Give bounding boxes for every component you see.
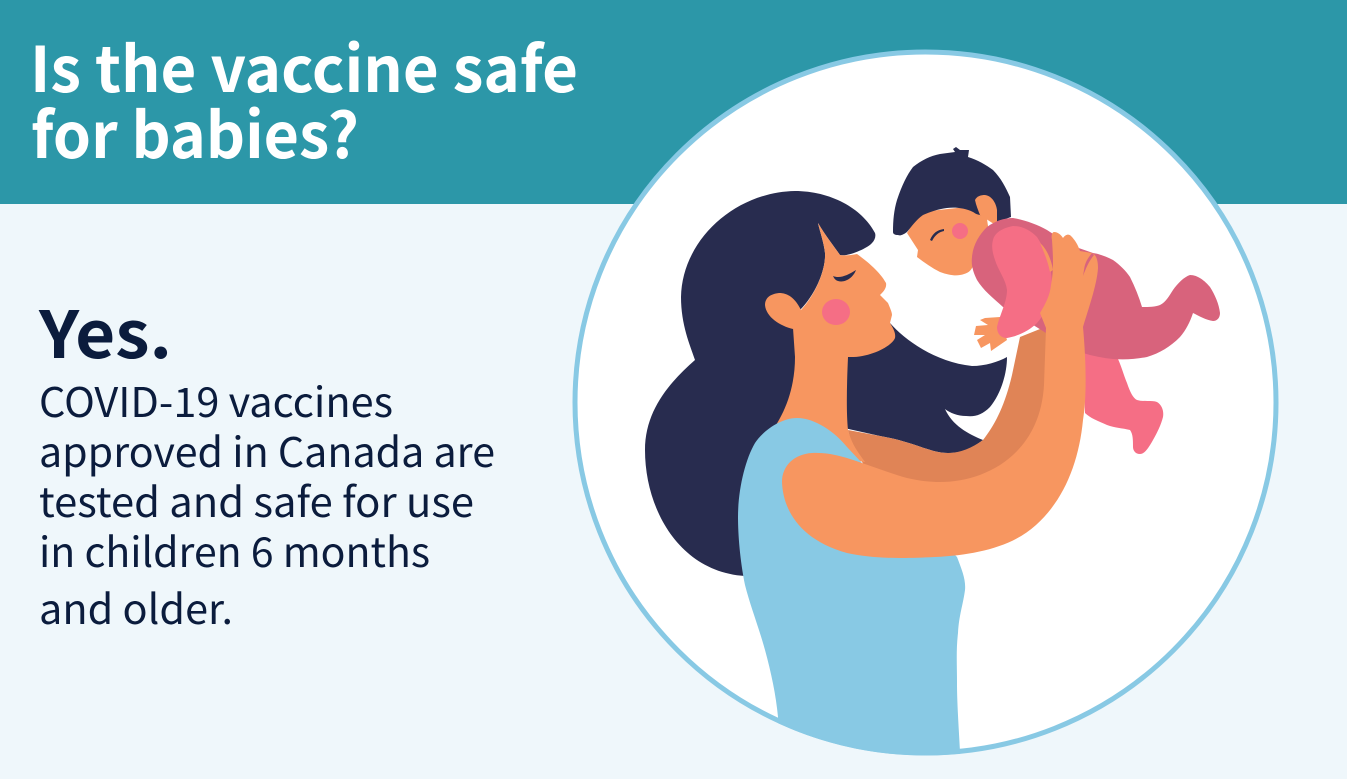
- mother near arm and hand: [782, 232, 1098, 558]
- baby rear leg: [1083, 353, 1163, 454]
- baby hair: [893, 147, 1011, 235]
- answer body text: tested and safe for use: [39, 469, 474, 529]
- answer heading: Yes.: [38, 283, 172, 377]
- header band: [0, 0, 1347, 204]
- title: [30, 20, 578, 177]
- baby ear: [975, 195, 997, 226]
- baby closed eye: [930, 229, 944, 241]
- baby arm: [992, 226, 1052, 338]
- mother ear: [765, 293, 801, 329]
- baby hand: [974, 317, 1007, 351]
- white circle frame: [575, 52, 1276, 753]
- answer body text: approved in Canada are: [39, 419, 495, 479]
- mother hair: [645, 191, 875, 576]
- mother hair behind neck: [846, 323, 1007, 453]
- baby face: [907, 205, 990, 275]
- mother closed eye: [833, 270, 856, 281]
- answer body text: in children 6 months: [39, 519, 430, 579]
- mother thumb: [1040, 243, 1053, 272]
- far arm in shade: [848, 325, 1050, 490]
- title: for babies?: [31, 86, 359, 177]
- answer body text: and older.: [39, 576, 233, 636]
- baby cheek: [952, 223, 968, 239]
- baby: [893, 147, 1220, 454]
- mother: [645, 191, 1050, 770]
- mother face and neck: [776, 223, 896, 462]
- mother cheek: [822, 299, 850, 325]
- finger gap: [1083, 253, 1094, 276]
- answer body text: [39, 369, 495, 636]
- mother dress: [738, 418, 965, 770]
- baby body and front leg: [972, 218, 1220, 359]
- answer body text: COVID-19 vaccines: [39, 369, 393, 429]
- title: Is the vaccine safe: [30, 20, 578, 111]
